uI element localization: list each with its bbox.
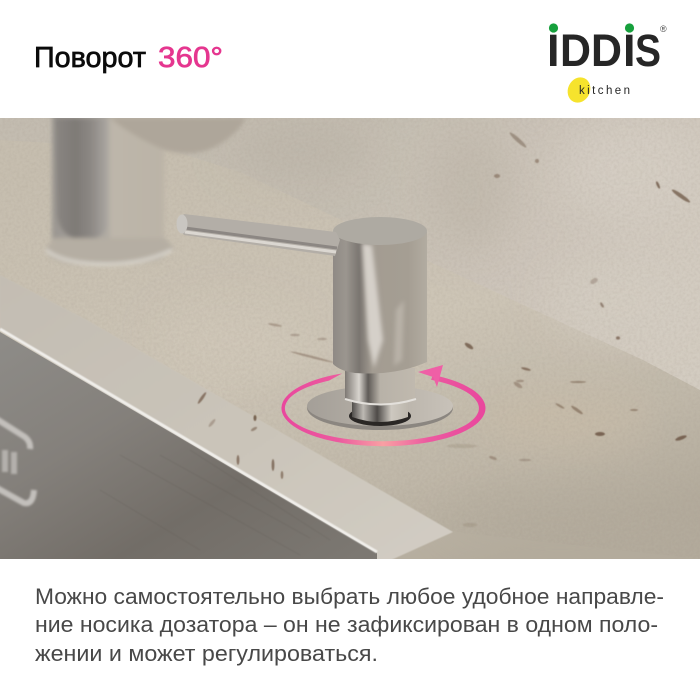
description text: жении и может регулироваться. bbox=[35, 641, 378, 666]
dispenser top cap bbox=[333, 217, 427, 245]
logo: IDDIS kitchen: I bbox=[547, 25, 560, 76]
front edge of countertop bbox=[195, 420, 452, 559]
dispenser stem bbox=[352, 402, 408, 422]
stone grain bbox=[101, 118, 699, 383]
body highlight bbox=[362, 243, 383, 368]
description text: Можно самостоятельно выбрать любое удобное направле- bbox=[35, 584, 664, 609]
logo: IDDIS kitchen: S bbox=[635, 25, 661, 76]
sink highlight edge bbox=[0, 329, 377, 552]
description text bbox=[35, 584, 664, 666]
title: Поворот bbox=[34, 42, 146, 74]
logo: IDDIS kitchen bbox=[547, 23, 667, 106]
dispenser body bbox=[333, 232, 427, 374]
description text: ние носика дозатора – он не зафиксирован в одном поло- bbox=[35, 612, 658, 637]
background faucet (blurred) bbox=[46, 110, 246, 265]
front edge pores bbox=[197, 391, 283, 479]
logo: IDDIS kitchen: ® bbox=[660, 24, 667, 34]
stainless steel sink bbox=[0, 332, 377, 560]
logo: IDDIS kitchen: D bbox=[560, 25, 591, 76]
title: 360° bbox=[158, 42, 223, 74]
countertop surface bbox=[305, 314, 700, 559]
brushed metal streaks bbox=[100, 450, 330, 555]
body right streak bbox=[394, 300, 404, 366]
dispenser collar bbox=[345, 368, 415, 405]
dispenser bbox=[176, 214, 453, 430]
stone wall bbox=[0, 118, 700, 390]
dispenser flange bbox=[307, 386, 453, 430]
lever spout bbox=[176, 214, 340, 256]
rotation arrow bbox=[281, 365, 485, 446]
logo: IDDIS kitchen: D bbox=[591, 25, 622, 76]
title bbox=[34, 42, 223, 74]
logo: IDDIS kitchen: I bbox=[623, 25, 636, 76]
blurred sink logo bbox=[0, 418, 34, 503]
product photo: dispenser on stone countertop bbox=[0, 110, 700, 565]
stone pores bbox=[268, 131, 691, 527]
wall shading bbox=[456, 169, 488, 220]
logo: IDDIS kitchen: kitchen bbox=[579, 85, 630, 97]
